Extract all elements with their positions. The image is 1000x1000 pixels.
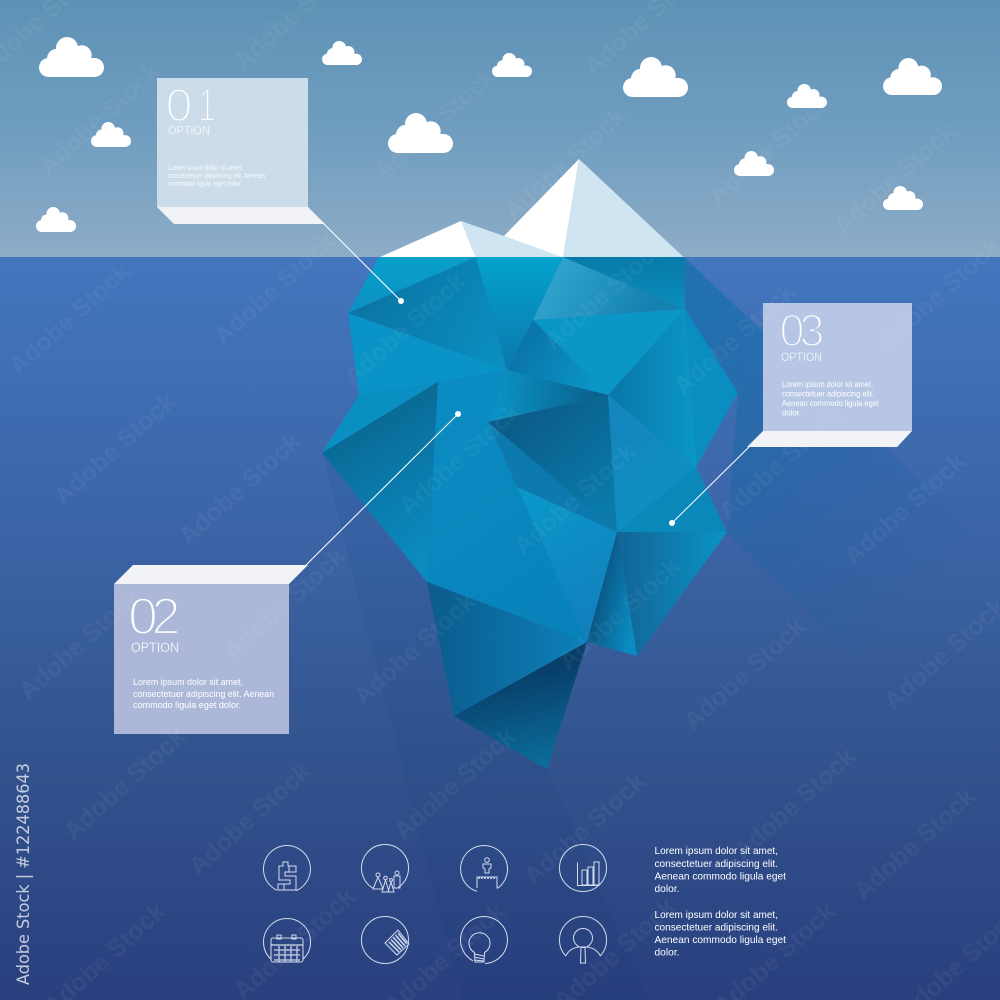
watermark layer: Adobe Stock — [369, 62, 501, 186]
number 03 — [780, 305, 824, 356]
body text 03: Lorem ipsum dolor sit amet, — [782, 380, 873, 389]
watermark layer: Adobe Stock — [389, 722, 521, 846]
panel ledge 02 — [114, 565, 308, 584]
sea background — [0, 257, 1000, 1000]
number 01: 0 — [166, 79, 192, 131]
cloud — [492, 53, 532, 77]
sky background — [0, 0, 1000, 258]
option label 03: OPTION — [781, 350, 822, 364]
icon: business person — [560, 916, 606, 963]
paragraph one: Aenean commodo ligula eget — [654, 870, 786, 882]
watermark layer: Adobe Stock — [509, 437, 641, 561]
paragraph two: consectetuer adipiscing elit. — [654, 922, 778, 934]
icon: family — [362, 845, 409, 892]
cloud — [883, 58, 942, 95]
panel face 02 — [114, 584, 289, 734]
body text 02: Lorem ipsum dolor sit amet, — [133, 677, 243, 687]
body text 01 — [168, 165, 265, 188]
watermark layer: Adobe Stock — [209, 227, 341, 351]
watermark layer: Adobe Stock — [339, 267, 471, 391]
paragraph one: Lorem ipsum dolor sit amet, — [654, 845, 778, 857]
paragraph one: consectetuer adipiscing elit. — [654, 858, 778, 870]
watermark layer: Adobe Stock — [679, 612, 811, 736]
watermark layer: Adobe Stock — [554, 552, 686, 676]
watermark layer: Adobe Stock — [394, 397, 526, 521]
cloud — [39, 37, 104, 77]
cloud — [883, 186, 923, 210]
option label 02: OPTION — [131, 639, 179, 655]
watermark layer: Adobe Stock — [59, 722, 191, 846]
panel face 01 — [157, 78, 308, 207]
icon: bar chart — [560, 844, 606, 892]
watermark layer: Adobe Stock — [34, 57, 166, 181]
watermark layer: Adobe Stock — [169, 82, 301, 206]
panel ledge 01 — [157, 207, 325, 224]
cloud — [623, 57, 688, 97]
watermark layer: Adobe Stock — [704, 87, 836, 211]
body text 03: dolor. — [782, 408, 801, 418]
connector line 03 — [669, 446, 750, 526]
iceberg below water — [322, 257, 738, 769]
body text 01: consectetuer adipiscing elit. Aenean — [168, 173, 265, 180]
vertical stock id: Adobe Stock | #122488643 — [14, 763, 34, 985]
option label 01: OPTION — [168, 124, 210, 138]
connector line 02 — [304, 411, 461, 567]
callout 02 — [114, 411, 461, 734]
watermark layer: Adobe Stock — [669, 277, 801, 401]
paragraph two: Lorem ipsum dolor sit amet, — [654, 909, 778, 921]
number 02: 2 — [152, 588, 180, 646]
watermark layer: Adobe Stock — [184, 757, 316, 881]
bottom text block — [654, 845, 786, 958]
watermark layer: Adobe Stock — [729, 742, 861, 866]
body text 03 — [782, 380, 880, 418]
callout 03 — [669, 303, 912, 526]
number 02: 0 — [128, 588, 158, 646]
clouds — [36, 37, 942, 232]
icon: calendar — [264, 918, 310, 962]
number 03: 3 — [800, 305, 824, 356]
cloud — [388, 113, 453, 153]
panel face 03 — [763, 303, 912, 431]
watermark layer: Adobe Stock — [49, 387, 181, 511]
paragraph one — [654, 845, 786, 895]
body text 02 — [133, 677, 274, 710]
connector line 01 — [322, 222, 404, 304]
watermark layer: Adobe Stock — [539, 232, 671, 356]
body text 02: commodo ligula eget dolor. — [133, 700, 241, 710]
watermark layer: Adobe Stock — [4, 257, 136, 381]
watermark layer: Adobe Stock — [14, 582, 146, 706]
paragraph two: dolor. — [654, 946, 680, 958]
cloud — [322, 41, 362, 65]
number 01: 1 — [198, 79, 216, 131]
icon: dollar — [263, 846, 310, 891]
paragraph one: dolor. — [654, 883, 680, 895]
watermark layer: Adobe Stock — [219, 542, 351, 666]
icon: notepad — [362, 916, 409, 964]
cloud — [91, 122, 131, 147]
number 01 — [166, 79, 216, 131]
watermark layer: Adobe Stock — [849, 782, 981, 906]
icon: podium speaker — [461, 845, 508, 891]
cloud — [787, 84, 827, 108]
iceberg shadow left — [322, 453, 650, 1000]
icon: light bulb — [460, 917, 507, 964]
body text 02: consectetuer adipiscing elit. Aenean — [133, 689, 274, 699]
paragraph two — [654, 909, 786, 958]
number 02 — [128, 588, 180, 646]
cloud — [734, 151, 774, 176]
watermark layer: Adobe Stock — [174, 427, 306, 551]
body text 03: consectetuer adipiscing elit. — [782, 390, 874, 398]
body text 01: Lorem ipsum dolor sit amet, — [168, 165, 243, 172]
watermark layer: Adobe Stock — [714, 402, 846, 526]
number 03: 0 — [780, 305, 804, 356]
paragraph two: Aenean commodo ligula eget — [654, 934, 786, 946]
callout 01 — [157, 78, 404, 304]
icon grid — [263, 844, 606, 964]
iceberg shadow right — [684, 257, 1000, 800]
watermark layer: Adobe Stock — [349, 587, 481, 711]
watermark layer: Adobe Stock — [829, 117, 961, 241]
panel ledge 03 — [747, 431, 912, 447]
cloud — [36, 207, 76, 232]
body text 01: commodo ligula eget dolor. — [168, 181, 242, 188]
body text 03: Aenean commodo ligula eget — [782, 399, 880, 408]
iceberg above water — [379, 159, 684, 258]
watermark layer: Adobe Stock — [519, 767, 651, 891]
watermark layer: Adobe Stock — [839, 447, 971, 571]
watermark layer: Adobe Stock — [499, 102, 631, 226]
